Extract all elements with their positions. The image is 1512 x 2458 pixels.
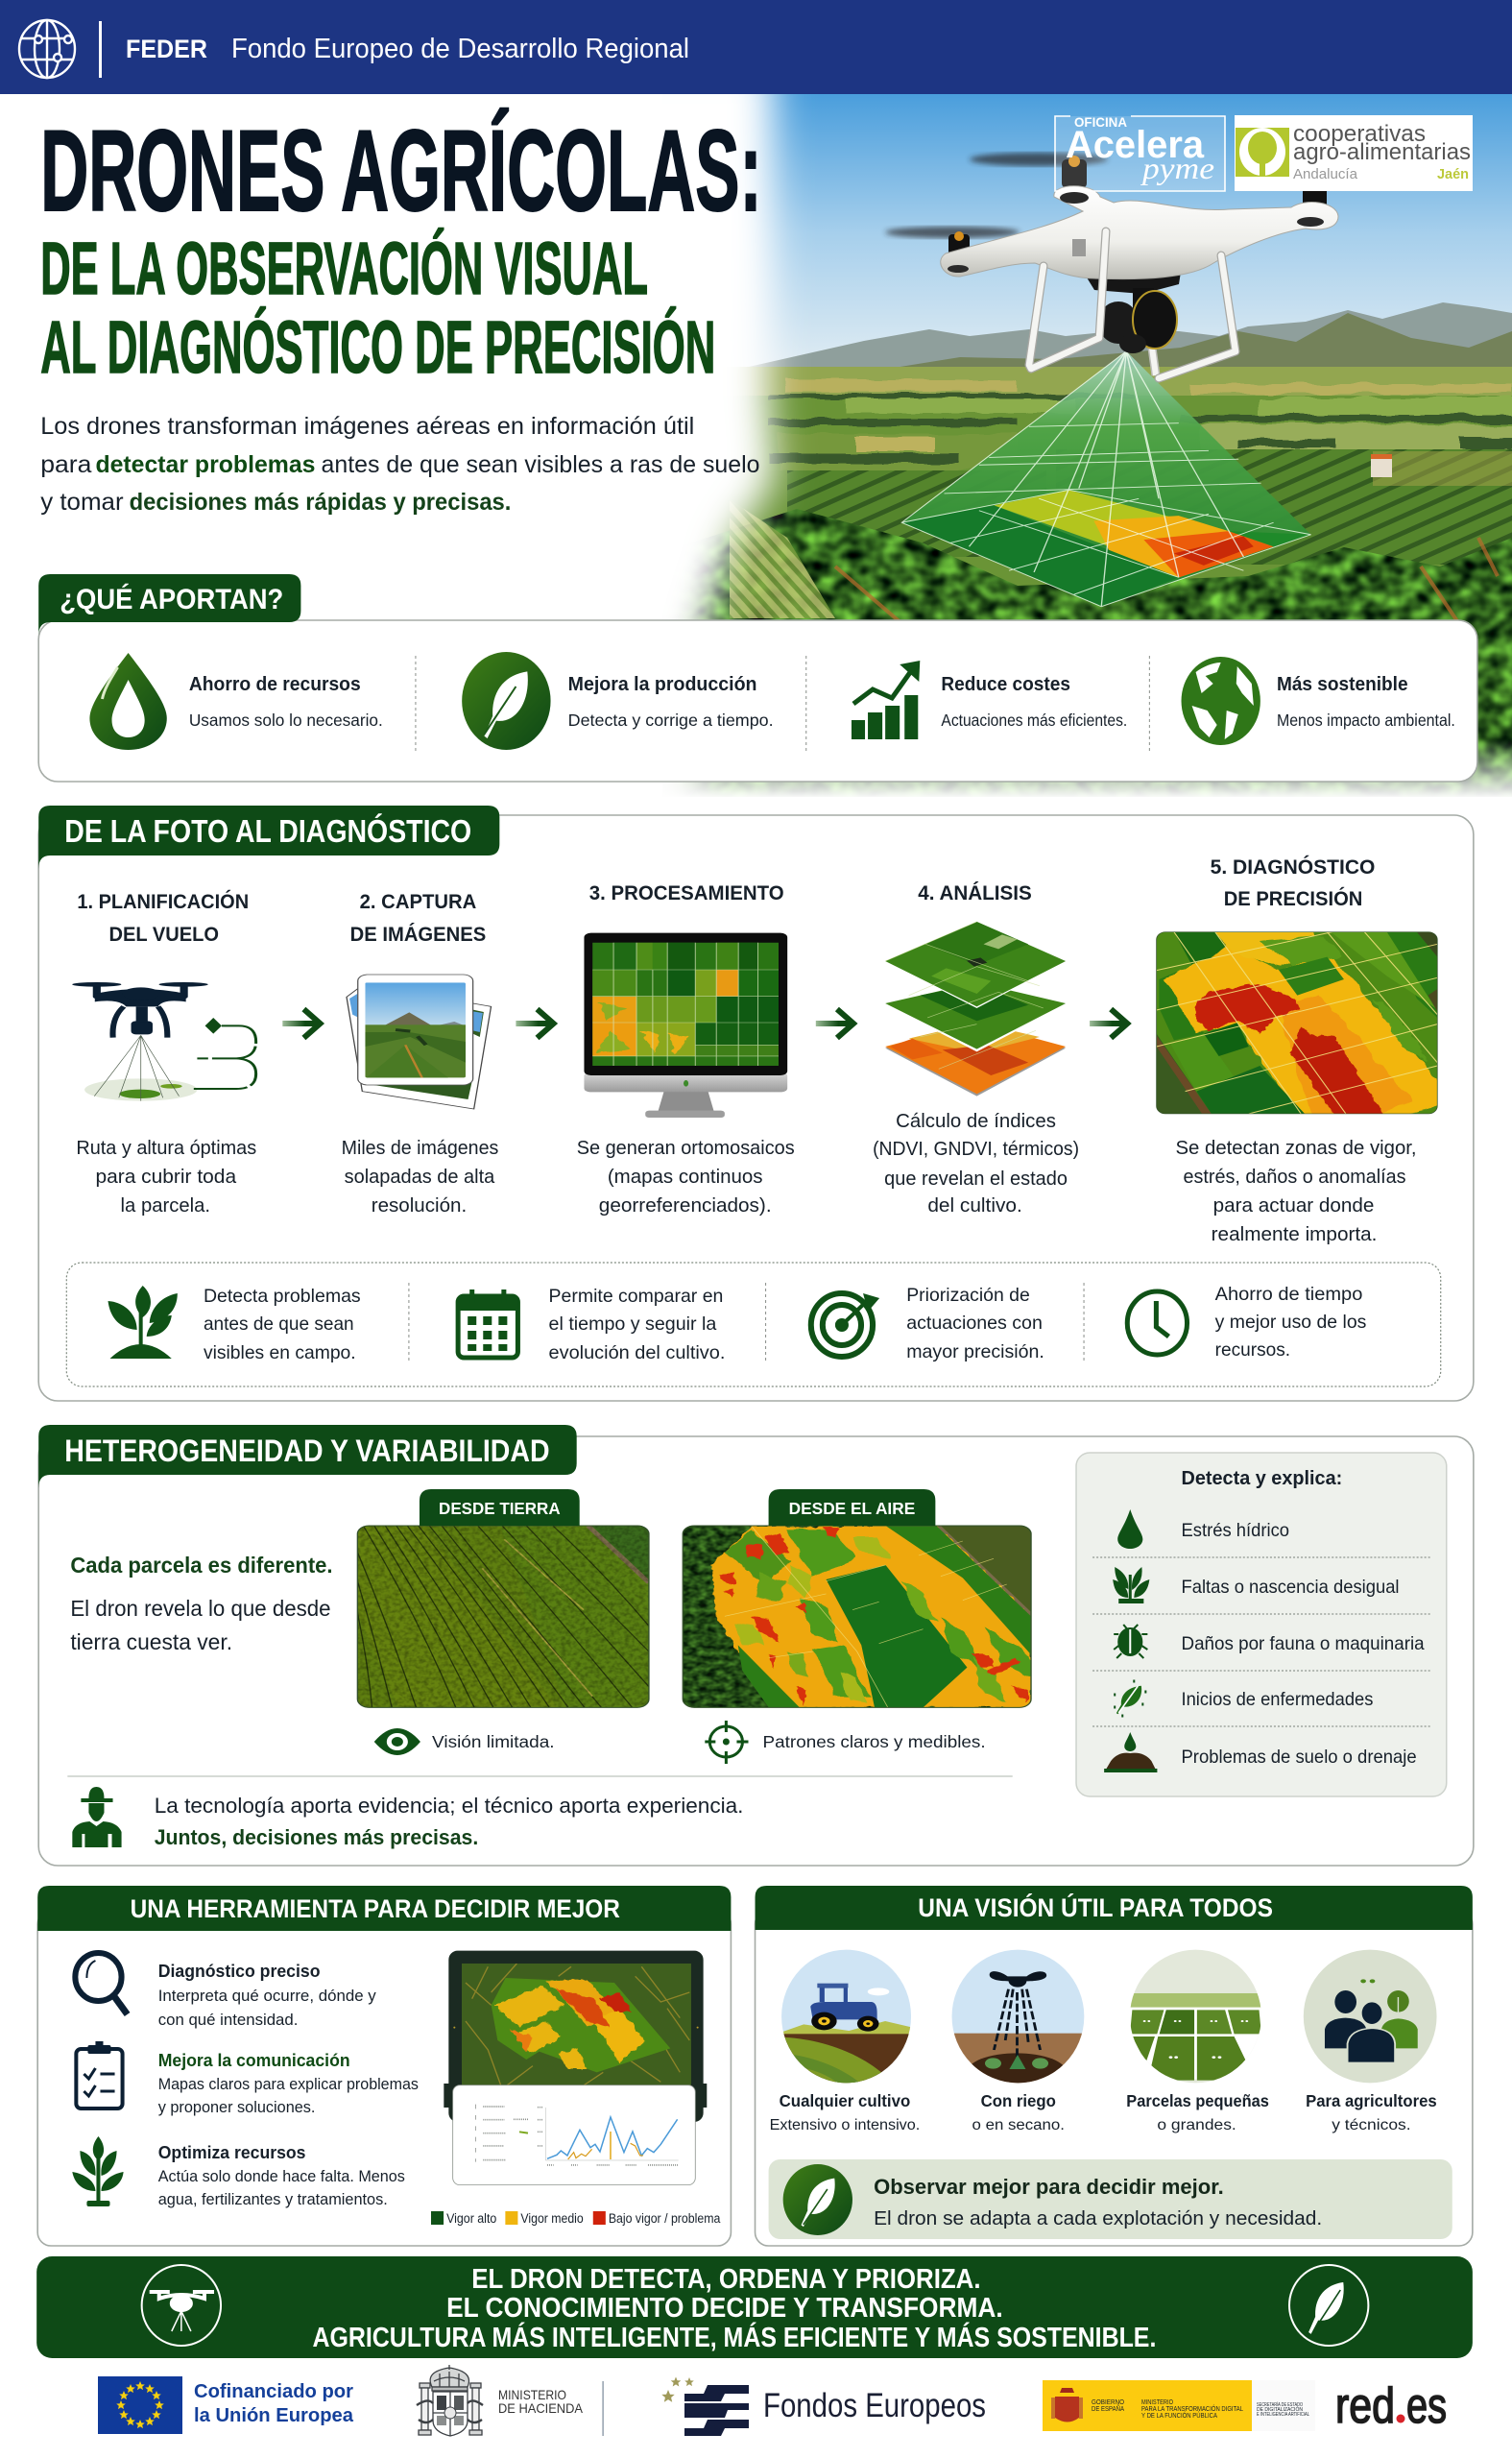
heading bar: herramienta xyxy=(37,1886,731,1931)
icon: target xyxy=(811,1293,879,1357)
icon: water drop xyxy=(89,653,167,750)
banner text: EL CONOCIMIENTO DECIDE Y TRANSFORMA. xyxy=(446,2293,1003,2324)
description: para cubrir toda xyxy=(95,1167,237,1188)
description: Ruta y altura óptimas xyxy=(76,1138,256,1159)
text: priorización: actuaciones con xyxy=(906,1313,1043,1334)
description: estrés, daños o anomalías xyxy=(1184,1167,1406,1188)
description: (NDVI, GNDVI, térmicos) xyxy=(873,1139,1079,1160)
intro paragraph: decisiones más rápidas y precisas. xyxy=(130,489,511,516)
logo: Gobierno de España: DE DIGITALIZACIÓN xyxy=(1257,2406,1303,2413)
text: mejora la producción: Mejora la producción xyxy=(568,674,757,695)
heading tab: heterogeneidad y variabilidad xyxy=(38,1425,577,1488)
logo: Gobierno de España: GOBIERNO xyxy=(1092,2398,1124,2406)
text: reduce costes: Reduce costes xyxy=(941,674,1070,695)
item: daños por fauna: Daños por fauna o maquinaria xyxy=(1182,1634,1425,1654)
icon: parcels xyxy=(1130,1949,1261,2084)
text: permite comparar: el tiempo y seguir la xyxy=(549,1314,717,1335)
text: reduce costes xyxy=(941,674,1127,730)
description: realmente importa. xyxy=(1212,1224,1377,1245)
text: ahorro de tiempo: Ahorro de tiempo xyxy=(1215,1285,1362,1305)
legend: Bajo vigor / problema xyxy=(609,2210,721,2226)
side box: detecta y explica xyxy=(1076,1453,1447,1796)
text: detecta problemas: Detecta problemas xyxy=(204,1287,361,1307)
text: ahorro de recursos: Usamos solo lo necesario. xyxy=(189,711,383,730)
text: ahorro de tiempo: recursos. xyxy=(1215,1340,1290,1361)
step 5: diagnóstico de precisión: 5. DIAGNÓSTICO xyxy=(1211,855,1375,879)
image: view from the ground xyxy=(357,1526,649,1707)
labels: audience: o grandes. xyxy=(1157,2116,1236,2133)
logo: EU flag and text: Cofinanciado por xyxy=(194,2381,353,2402)
caption: patrones claros: Patrones claros y medibles. xyxy=(763,1732,986,1751)
labels: audience xyxy=(770,2091,1437,2133)
description xyxy=(76,1138,256,1217)
text: diagnóstico preciso: Interpreta qué ocurre, dónde y xyxy=(158,1987,377,2005)
heading tab: de la foto al diagnóstico xyxy=(38,806,499,869)
logo: Gobierno de España: MINISTERIO xyxy=(1141,2398,1173,2406)
icon: calendar xyxy=(458,1289,517,1358)
icon: drone in circle xyxy=(142,2265,221,2346)
heading bar: herramienta: UNA HERRAMIENTA PARA DECIDIR MEJOR xyxy=(131,1894,620,1923)
icon: leaf circle xyxy=(783,2164,852,2235)
icon: stacked map layers xyxy=(885,922,1066,1096)
text: más sostenible: Más sostenible xyxy=(1277,674,1408,695)
text: optimiza recursos xyxy=(158,2142,405,2208)
description: Se detectan zonas de vigor, xyxy=(1175,1138,1417,1159)
labels: audience: Para agricultores xyxy=(1306,2091,1437,2110)
item: estrés hídrico: Estrés hídrico xyxy=(1182,1521,1289,1541)
text: ahorro de recursos: Ahorro de recursos xyxy=(189,674,361,695)
item: inicios de enfermedades: Inicios de enfermedades xyxy=(1182,1690,1373,1710)
description xyxy=(873,1111,1079,1217)
logo: Cooperativas Agro-alimentarias: Andalucía xyxy=(1293,166,1358,182)
heading tab: de la foto al diagnóstico: DE LA FOTO AL DIAGNÓSTICO xyxy=(64,813,471,850)
text: cada parcela es diferente: tierra cuesta ver. xyxy=(70,1629,232,1654)
intro paragraph xyxy=(40,413,760,516)
labels: audience: Extensivo o intensivo. xyxy=(770,2116,920,2133)
label pill: desde el aire xyxy=(769,1489,935,1526)
heading tab: ¿Qué aportan?: ¿QUÉ APORTAN? xyxy=(60,583,283,615)
text: mejora la producción: Detecta y corrige a tiempo. xyxy=(568,711,774,730)
banner text xyxy=(312,2264,1156,2353)
description: Miles de imágenes xyxy=(342,1138,498,1159)
logo: Cooperativas Agro-alimentarias xyxy=(1235,115,1473,191)
description: Se generan ortomosaicos xyxy=(577,1138,795,1159)
logo: Oficina Acelera Pyme: Acelera xyxy=(1066,124,1205,166)
text: permite comparar: evolución del cultivo. xyxy=(549,1343,725,1363)
title: DE LA OBSERVACIÓN VISUAL xyxy=(40,228,648,310)
icon: soil and drop xyxy=(1104,1732,1157,1772)
label pill: desde el aire: DESDE EL AIRE xyxy=(789,1499,915,1518)
step 1: planificación del vuelo xyxy=(72,890,256,1217)
icon: globe xyxy=(1182,657,1260,745)
text: permite comparar xyxy=(549,1287,725,1363)
text: ahorro de tiempo xyxy=(1215,1285,1366,1361)
labels: audience: y técnicos. xyxy=(1332,2116,1411,2133)
arrow xyxy=(1090,1009,1127,1038)
icon: farmer xyxy=(72,1787,122,1847)
arrow xyxy=(282,1009,320,1038)
description: que revelan el estado xyxy=(884,1169,1068,1190)
intro paragraph: y tomar xyxy=(40,489,124,516)
label pill: desde tierra xyxy=(420,1489,580,1526)
logo: Oficina Acelera Pyme xyxy=(1055,114,1225,191)
text: reduce costes: Actuaciones más eficientes. xyxy=(941,711,1127,730)
icon: beetle xyxy=(1114,1625,1147,1658)
logo: Cooperativas Agro-alimentarias: cooperativas xyxy=(1293,121,1426,147)
text: mejora la producción xyxy=(568,674,774,730)
legend xyxy=(431,2210,721,2226)
text: cada parcela es diferente: El dron revela lo que desde xyxy=(70,1596,331,1621)
icon: tractor xyxy=(777,1949,912,2085)
title: DRONES AGRÍCOLAS: xyxy=(40,107,762,235)
logo: EU flag and text: la Unión Europea xyxy=(194,2405,354,2426)
logo: Ministerio de Hacienda xyxy=(417,2365,584,2436)
header text: Fondo Europeo de Desarrollo Regional xyxy=(231,34,689,64)
logo: Fondos Europeos xyxy=(661,2377,986,2436)
description: para actuar donde xyxy=(1213,1195,1374,1217)
icon: drone with flight route xyxy=(72,982,256,1101)
intro paragraph: detectar problemas xyxy=(95,451,315,478)
text: optimiza recursos: Actúa solo donde hace falta. Menos xyxy=(158,2167,405,2185)
title xyxy=(40,107,762,389)
step 4: análisis: 4. ANÁLISIS xyxy=(918,882,1032,904)
text: tecnología y experiencia: La tecnología aporta evidencia; el técnico aporta experiencia. xyxy=(155,1794,743,1818)
panel: ¿Qué aportan? xyxy=(38,574,1477,782)
icon: farmers and technicians xyxy=(1302,1949,1438,2084)
icon: monitor with orthomosaic xyxy=(584,933,787,1118)
text: mejora la comunicación: Mapas claros para explicar problemas xyxy=(158,2075,419,2093)
step 3: procesamiento: 3. PROCESAMIENTO xyxy=(589,882,784,904)
logo: Ministerio de Hacienda: MINISTERIO xyxy=(498,2387,566,2402)
intro paragraph: antes de que sean visibles a ras de suelo xyxy=(321,451,760,478)
heading bar: visión xyxy=(756,1886,1473,1930)
logo: Oficina Acelera Pyme: pyme xyxy=(1140,151,1214,185)
logo: Ministerio de Hacienda: DE HACIENDA xyxy=(498,2400,584,2416)
text: permite comparar: Permite comparar en xyxy=(549,1287,723,1307)
icon: clipboard xyxy=(76,2041,123,2109)
panel: una visión útil para todos xyxy=(756,1886,1473,2246)
description: del cultivo. xyxy=(927,1195,1022,1217)
labels: audience: Cualquier cultivo xyxy=(780,2091,910,2110)
text: mejora la comunicación: Mejora la comunicación xyxy=(158,2050,350,2070)
icon: drop xyxy=(1117,1509,1142,1549)
description: solapadas de alta xyxy=(345,1167,495,1188)
step 1: planificación del vuelo: 1. PLANIFICACIÓN xyxy=(77,890,249,913)
step 4: análisis xyxy=(873,882,1079,1217)
icon: magnifier xyxy=(75,1953,128,2014)
label pill: desde tierra: DESDE TIERRA xyxy=(439,1499,561,1518)
item: problemas de suelo: Problemas de suelo o drenaje xyxy=(1182,1747,1417,1768)
text: detecta problemas: visibles en campo. xyxy=(204,1343,356,1363)
icon: sprout xyxy=(1113,1567,1149,1603)
text: ahorro de tiempo: y mejor uso de los xyxy=(1215,1313,1366,1333)
item: faltas o nascencia: Faltas o nascencia desigual xyxy=(1182,1578,1400,1598)
description: la parcela. xyxy=(121,1195,210,1217)
footer logos xyxy=(98,2365,1447,2436)
text: cada parcela es diferente xyxy=(70,1553,333,1654)
callout: observar mejor xyxy=(769,2159,1452,2239)
closing banner xyxy=(36,2256,1473,2358)
icon: leaf in circle xyxy=(1289,2265,1368,2346)
text: mejora la comunicación: y proponer soluciones. xyxy=(158,2098,315,2116)
logo: Cooperativas Agro-alimentarias: agro-alimentarias xyxy=(1293,139,1471,165)
chart: vigor heat map xyxy=(1156,931,1438,1114)
image: view from the air xyxy=(683,1526,1031,1707)
icon: growth chart xyxy=(852,661,920,739)
text: diagnóstico preciso xyxy=(158,1961,377,2029)
banner text: AGRICULTURA MÁS INTELIGENTE, MÁS EFICIENTE Y MÁS SOSTENIBLE. xyxy=(312,2321,1156,2353)
text: tecnología y experiencia: Juntos, decisiones más precisas. xyxy=(155,1825,478,1849)
description: georreferenciados). xyxy=(599,1195,772,1217)
text: tecnología y experiencia xyxy=(155,1794,743,1849)
header bar: FEDER xyxy=(0,0,1512,94)
step 1: planificación del vuelo: DEL VUELO xyxy=(109,924,219,946)
logo: Gobierno de España: Y DE LA FUNCIÓN PÚBLICA xyxy=(1141,2411,1217,2420)
banner text: EL DRON DETECTA, ORDENA Y PRIORIZA. xyxy=(471,2264,981,2295)
legend: Vigor alto xyxy=(446,2210,496,2226)
arrow xyxy=(816,1009,853,1038)
icon: crosshair xyxy=(705,1721,748,1764)
logo: Gobierno de España: PARA LA TRANSFORMACIÓN DIGITAL xyxy=(1141,2404,1243,2413)
labels: audience: Con riego xyxy=(981,2091,1056,2110)
logo: red.es xyxy=(1335,2378,1447,2434)
text: mejora la comunicación xyxy=(158,2050,419,2116)
panel: heterogeneidad y variabilidad xyxy=(38,1425,1474,1866)
icon: sprout xyxy=(108,1286,178,1359)
illustrations: four audience circles xyxy=(777,1949,1438,2091)
benefits strip xyxy=(66,1263,1441,1386)
text: optimiza recursos: Optimiza recursos xyxy=(158,2142,305,2162)
caption: visión limitada: Visión limitada. xyxy=(432,1732,555,1751)
icon: diseased leaf xyxy=(1114,1681,1146,1716)
step 2: captura de imágenes: 2. CAPTURA xyxy=(360,891,476,913)
text: priorización: Priorización de xyxy=(906,1286,1030,1306)
text: priorización: mayor precisión. xyxy=(906,1342,1044,1362)
labels: audience: Parcelas pequeñas xyxy=(1126,2091,1269,2110)
panel: una herramienta para decidir mejor xyxy=(37,1886,731,2246)
icon: clock xyxy=(1127,1291,1188,1355)
logo: Gobierno de España xyxy=(1043,2380,1315,2431)
icon: irrigation xyxy=(951,1949,1087,2091)
step 2: captura de imágenes xyxy=(342,891,498,1217)
logo: Cooperativas Agro-alimentarias: Jaén xyxy=(1437,166,1469,182)
logo: Gobierno de España: SECRETARÍA DE ESTADO xyxy=(1257,2401,1303,2408)
logo: red.es: es xyxy=(1406,2378,1447,2434)
description xyxy=(342,1138,498,1217)
text: más sostenible: Menos impacto ambiental. xyxy=(1277,711,1455,730)
step 5: diagnóstico de precisión: DE PRECISIÓN xyxy=(1224,887,1362,910)
step 3: procesamiento xyxy=(577,882,795,1217)
heading tab: heterogeneidad y variabilidad: HETEROGENEIDAD Y VARIABILIDAD xyxy=(64,1434,550,1468)
icon: stack of photos xyxy=(347,975,492,1109)
text: priorización xyxy=(906,1286,1044,1362)
logo: Gobierno de España: E INTELIGENCIA ARTIFICIAL xyxy=(1257,2412,1309,2418)
panel: de la foto al diagnóstico xyxy=(38,806,1474,1401)
text: más sostenible xyxy=(1277,674,1455,730)
text: optimiza recursos: agua, fertilizantes y tratamientos. xyxy=(158,2190,388,2208)
callout: observar mejor: El dron se adapta a cada explotación y necesidad. xyxy=(874,2208,1322,2229)
icon: white drone with gimbal camera xyxy=(885,153,1338,378)
header text: FEDER xyxy=(126,35,207,63)
logo: EU flag and text xyxy=(98,2376,354,2434)
heading bar: visión: UNA VISIÓN ÚTIL PARA TODOS xyxy=(918,1892,1273,1922)
callout: observar mejor: Observar mejor para decidir mejor. xyxy=(874,2175,1224,2199)
arrow xyxy=(516,1009,554,1038)
icon: plant xyxy=(72,2136,124,2206)
logo: Oficina Acelera Pyme: OFICINA xyxy=(1074,114,1127,130)
text: detecta problemas: antes de que sean xyxy=(204,1314,354,1335)
icon: FEDER globe xyxy=(19,20,75,78)
logo: red.es: red xyxy=(1335,2378,1395,2434)
intro paragraph: para xyxy=(40,451,91,478)
step 2: captura de imágenes: DE IMÁGENES xyxy=(350,924,486,946)
intro paragraph: Los drones transforman imágenes aéreas en información útil xyxy=(40,413,694,440)
tablet with vigor map and chart xyxy=(444,1951,707,2185)
step 5: diagnóstico de precisión xyxy=(1157,855,1437,1245)
text: diagnóstico preciso: Diagnóstico preciso xyxy=(158,1961,320,1981)
legend: Vigor medio xyxy=(520,2210,584,2226)
description: resolución. xyxy=(372,1195,467,1217)
logo: Gobierno de España: DE ESPAÑA xyxy=(1092,2404,1124,2413)
heading tab: ¿Qué aportan? xyxy=(38,574,300,636)
description xyxy=(577,1138,795,1217)
title: AL DIAGNÓSTICO DE PRECISIÓN xyxy=(40,306,715,389)
text: ahorro de recursos xyxy=(189,674,383,730)
icon: eye xyxy=(374,1728,420,1755)
side box: detecta y explica: Detecta y explica: xyxy=(1182,1468,1342,1489)
icon: scan pyramid with vigor grid xyxy=(901,351,1311,607)
description xyxy=(1175,1138,1417,1245)
logo: Fondos Europeos: Fondos Europeos xyxy=(763,2387,986,2424)
text: detecta problemas xyxy=(204,1287,361,1363)
hero image: drone over fields xyxy=(676,94,1512,797)
description: Cálculo de índices xyxy=(896,1111,1056,1132)
icon: leaf circle xyxy=(462,652,551,750)
text: diagnóstico preciso: con qué intensidad. xyxy=(158,2011,298,2029)
labels: audience: o en secano. xyxy=(972,2116,1065,2133)
text: cada parcela es diferente: Cada parcela es diferente. xyxy=(70,1553,333,1578)
description: (mapas continuos xyxy=(608,1167,763,1188)
